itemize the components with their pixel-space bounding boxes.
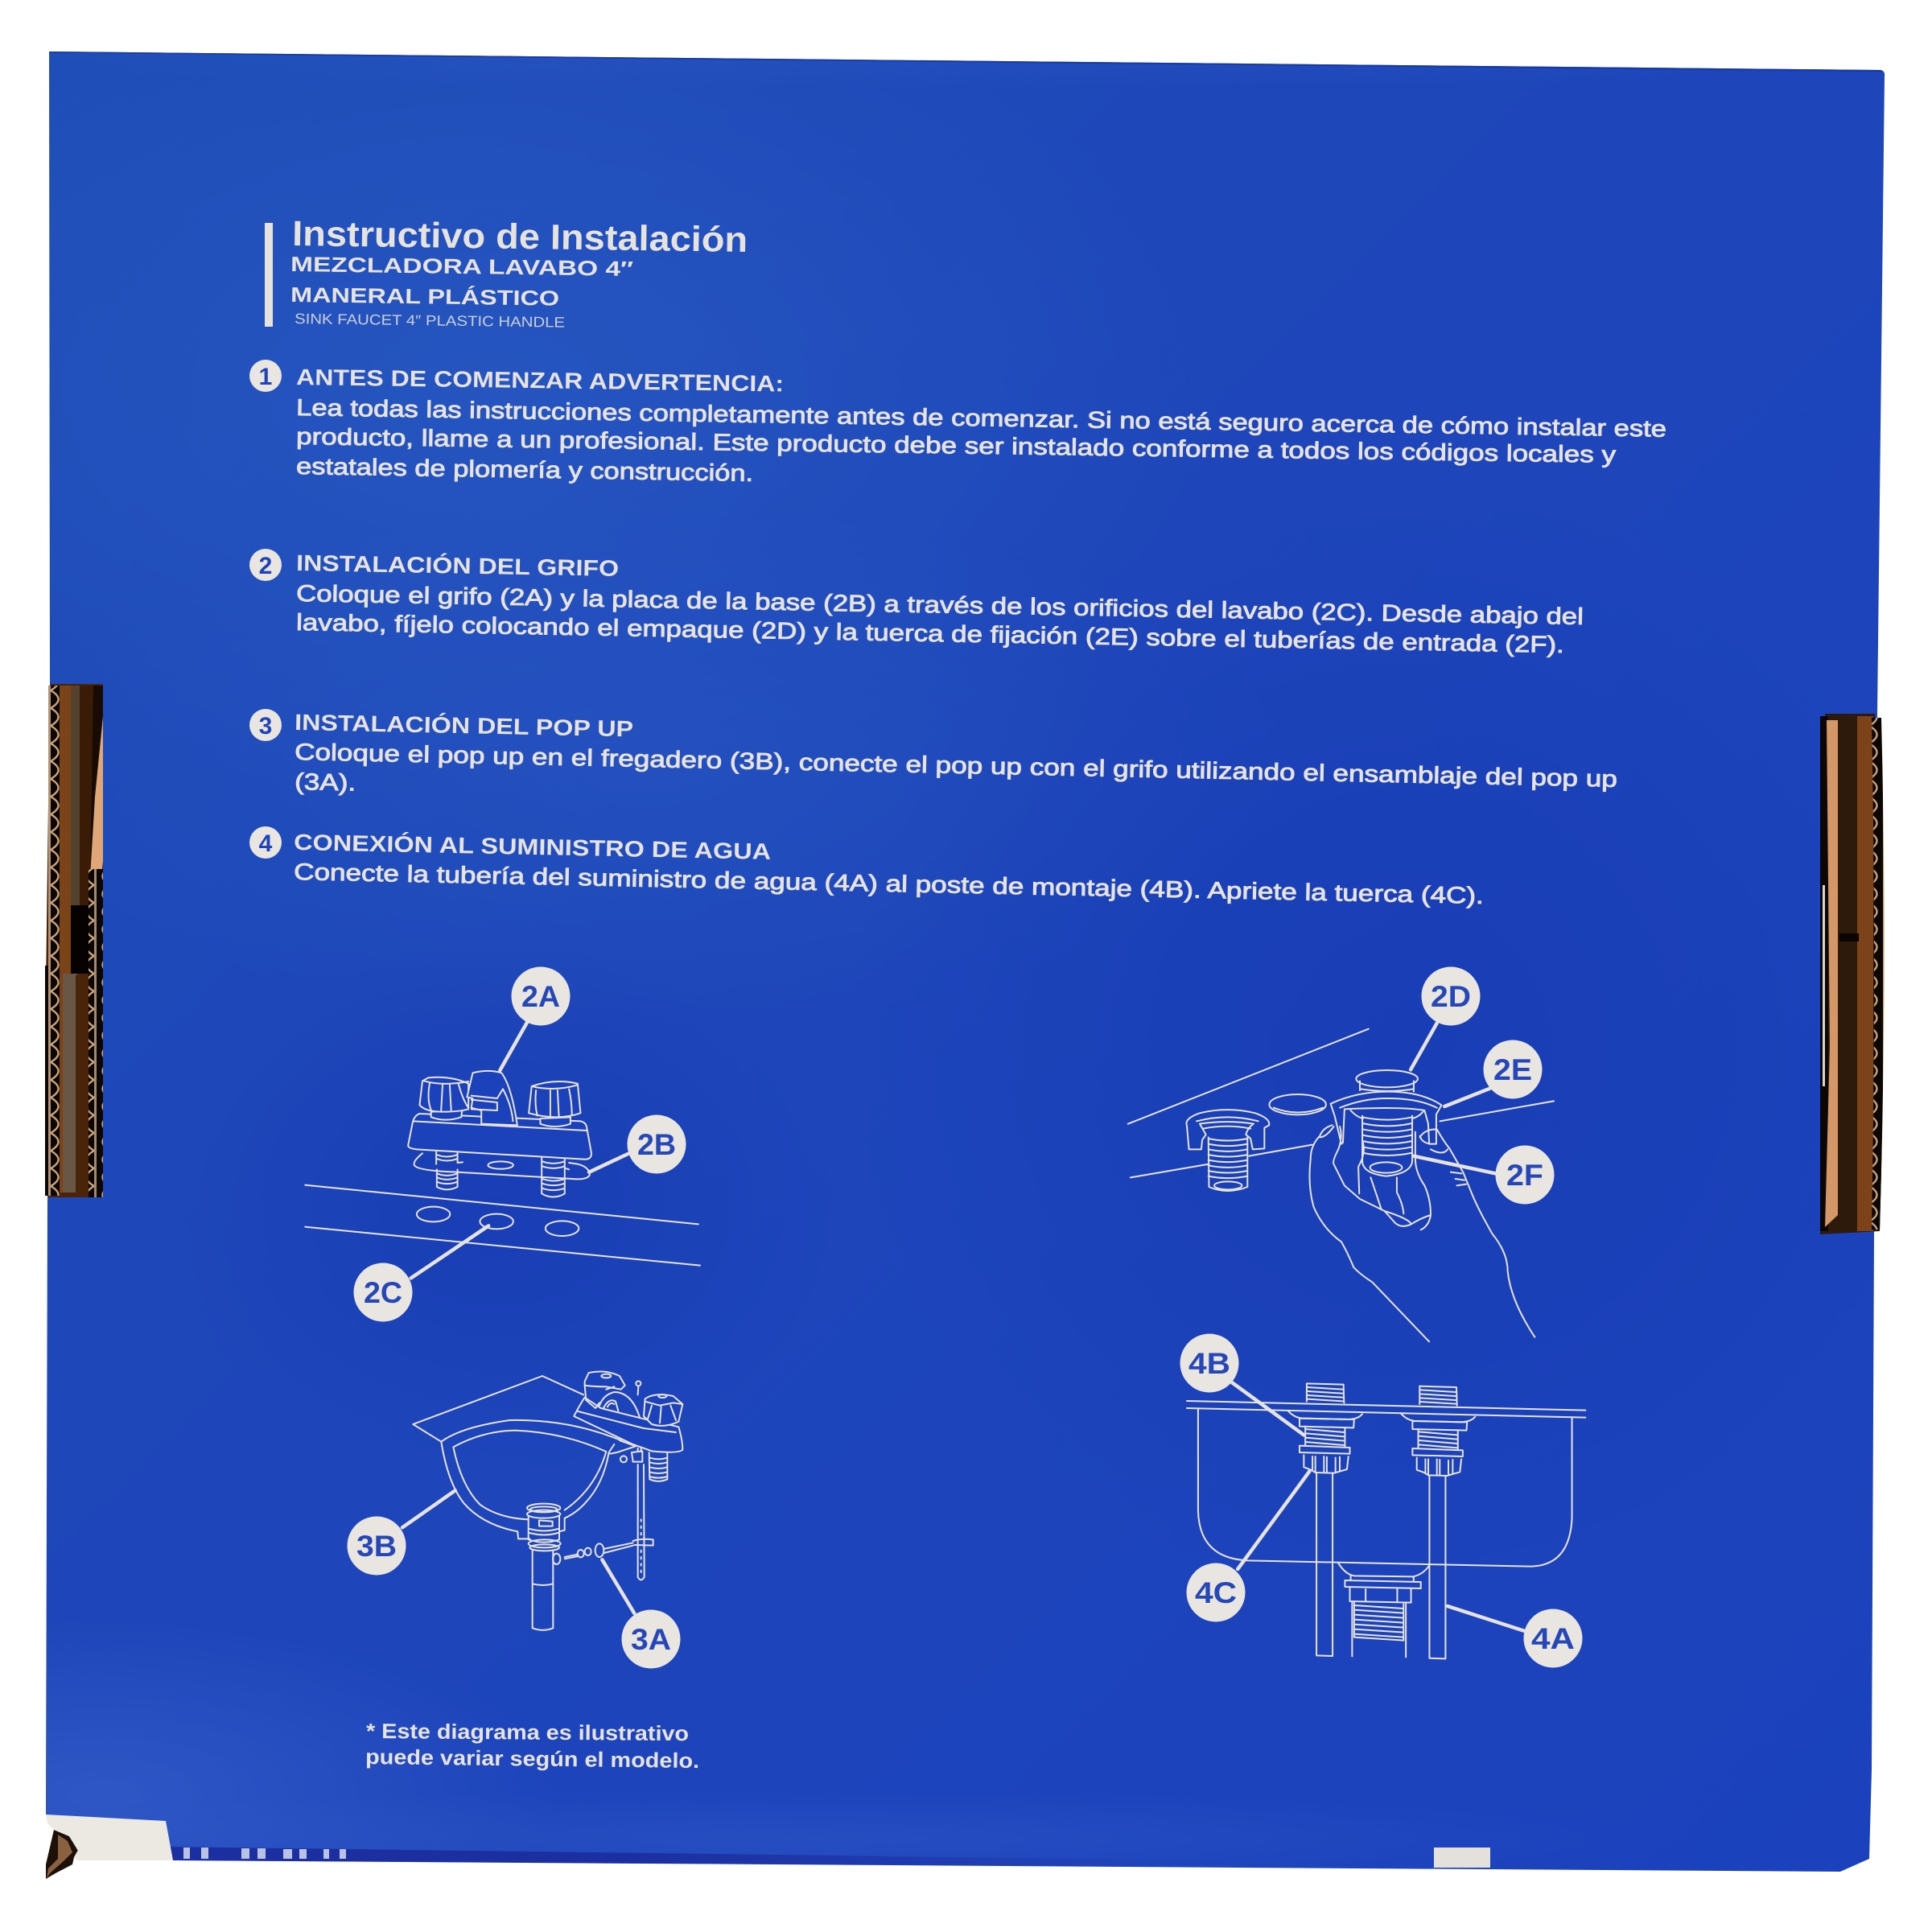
step 1 warning: producto, llame a un profesional. Este producto debe ser instalado conforme a todos los códigos locales y <box>296 424 1617 468</box>
title block: Instructivo de Instalación <box>292 214 748 260</box>
panel: right cardboard notch <box>1820 714 1885 1234</box>
white tab bottom edge <box>1434 1848 1490 1868</box>
callout 3B <box>348 1516 406 1576</box>
callout 2A <box>512 967 570 1025</box>
callout 4A <box>1524 1609 1582 1667</box>
diagram: faucet over sink holes <box>305 967 700 1321</box>
callout 2E: 2E <box>1493 1053 1532 1086</box>
step 1 warning <box>249 360 1666 487</box>
step 3 pop up installation: INSTALACIÓN DEL POP UP <box>295 710 633 741</box>
panel: torn corner and white paper tab <box>46 1815 173 1879</box>
title block: MEZCLADORA LAVABO 4″ <box>290 252 633 281</box>
step 1 warning: Lea todas las instrucciones completamente antes de comenzar. Si no está seguro acerca de cómo instalar este <box>296 395 1666 443</box>
step 2 faucet installation: INSTALACIÓN DEL GRIFO <box>296 550 619 581</box>
callout 4C <box>1186 1563 1246 1622</box>
step 4 water connection: Conecte la tubería del suministro de agua (4A) al poste de montaje (4B). Apriete la tuerca (4C). <box>294 859 1484 909</box>
callout 2F: 2F <box>1506 1159 1543 1192</box>
step 1 warning: estatales de plomería y construcción. <box>296 454 753 487</box>
callout 4B: 4B <box>1188 1347 1230 1380</box>
footnote: * Este diagrama es ilustrativo <box>366 1719 689 1745</box>
step 2 faucet installation: 2 <box>259 553 272 579</box>
callout 3A <box>621 1609 681 1669</box>
step 3 pop up installation: Coloque el pop up en el fregadero (3B), conecte el pop up con el grifo utilizando el ensamblaje del pop up <box>295 739 1617 793</box>
footnote: puede variar según el modelo. <box>365 1745 699 1773</box>
step 2 faucet installation: lavabo, fíjelo colocando el empaque (2D) y la tuerca de fijación (2E) sobre el tuberías de entrada (2F). <box>296 610 1564 658</box>
title block <box>265 214 748 331</box>
title block: MANERAL PLÁSTICO <box>290 282 559 311</box>
callout 2C: 2C <box>364 1276 402 1309</box>
step 3 pop up installation <box>249 709 1617 797</box>
step 1 warning: ANTES DE COMENZAR ADVERTENCIA: <box>296 365 784 396</box>
callout 2C <box>354 1263 412 1321</box>
diagram: hand fastening nut <box>1128 967 1555 1341</box>
callout 2D: 2D <box>1431 980 1471 1013</box>
diagram: water supply connection <box>1180 1334 1585 1667</box>
callout 2B: 2B <box>637 1128 676 1161</box>
step 2 faucet installation <box>249 549 1584 658</box>
callout 2D <box>1421 967 1481 1025</box>
step 3 pop up installation: (3A). <box>295 769 356 797</box>
step 1 warning: 1 <box>259 364 272 390</box>
callout 2A: 2A <box>521 980 560 1013</box>
footnote <box>365 1719 699 1773</box>
title block: SINK FAUCET 4″ PLASTIC HANDLE <box>295 311 565 331</box>
diagram: pop up assembly under sink <box>348 1372 682 1669</box>
callout 3A: 3A <box>631 1623 671 1656</box>
callout 2B <box>628 1115 686 1173</box>
panel: left cardboard notch <box>45 684 103 1197</box>
callout 4A: 4A <box>1531 1622 1575 1655</box>
step 4 water connection: CONEXIÓN AL SUMINISTRO DE AGUA <box>294 830 771 864</box>
callout 4B <box>1180 1334 1239 1392</box>
step 4 water connection: 4 <box>259 830 273 857</box>
step 3 pop up installation: 3 <box>259 713 272 739</box>
callout 4C: 4C <box>1195 1576 1237 1609</box>
step 2 faucet installation: Coloque el grifo (2A) y la placa de la base (2B) a través de los orificios del lavabo (2C). Desde abajo del <box>296 581 1584 630</box>
callout 3B: 3B <box>356 1530 397 1563</box>
step 4 water connection <box>249 826 1484 909</box>
callout 2E <box>1484 1040 1542 1099</box>
callout 2F <box>1495 1146 1555 1204</box>
